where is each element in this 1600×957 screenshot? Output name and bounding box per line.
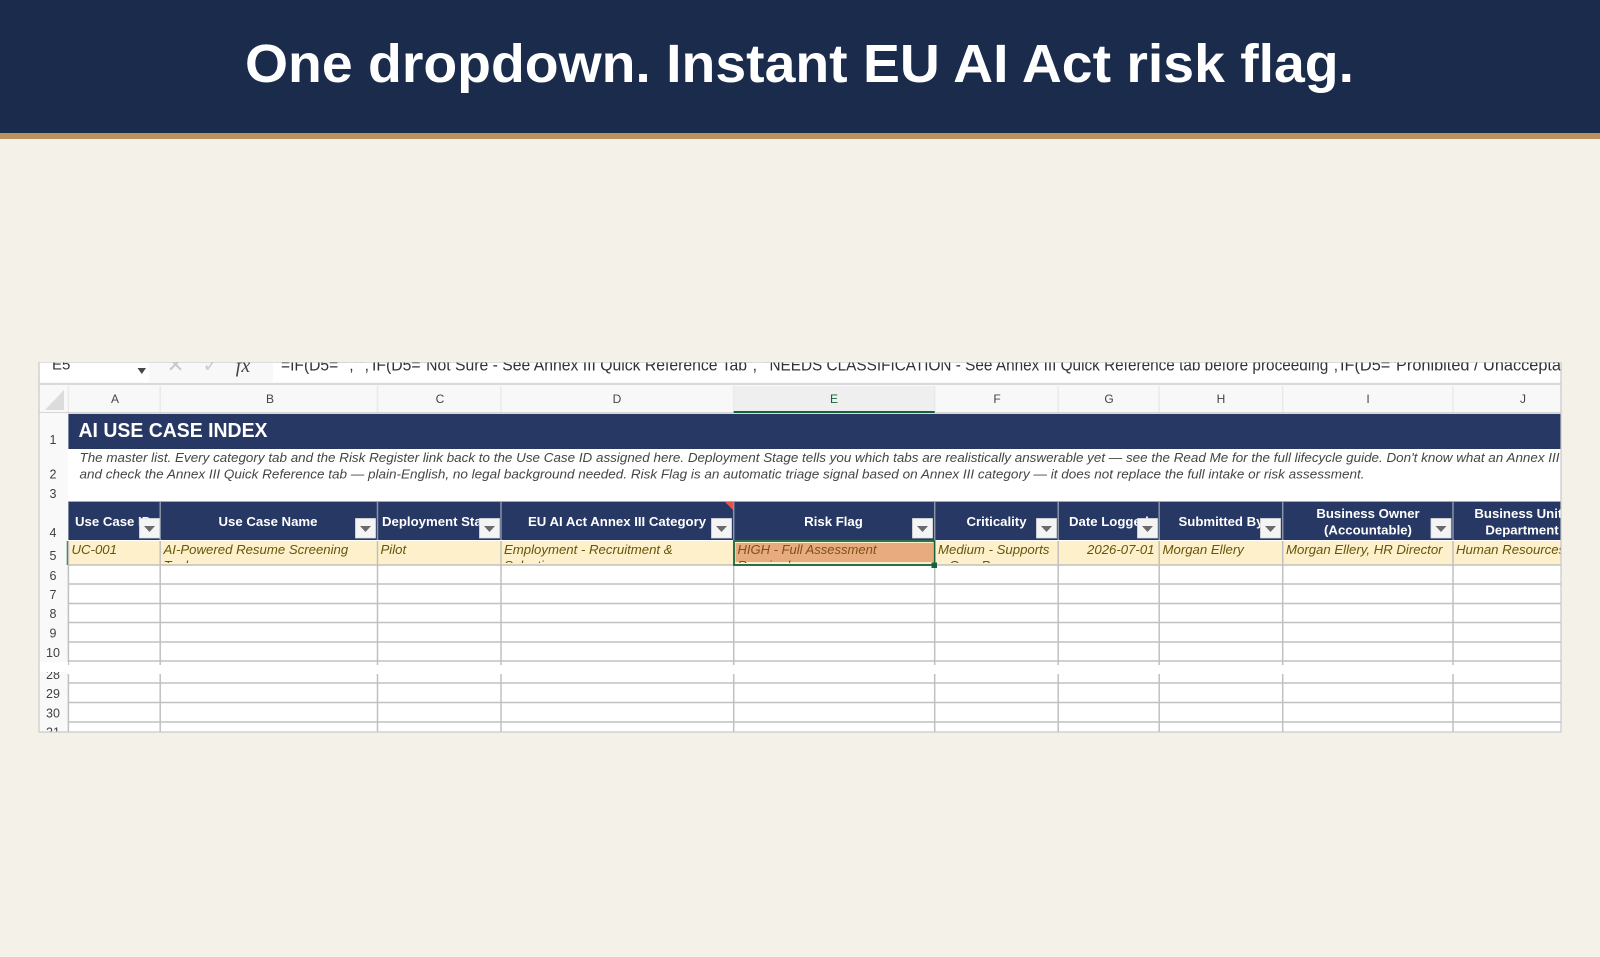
row numbers: 30 bbox=[46, 706, 60, 720]
data row UC-001: Human Resources bbox=[1456, 542, 1566, 557]
spreadsheet screenshot bbox=[39, 354, 1570, 740]
data row UC-001: Required bbox=[738, 558, 791, 573]
row numbers: 5 bbox=[50, 549, 57, 563]
row numbers: 2 bbox=[50, 468, 57, 482]
column headers: E bbox=[830, 392, 838, 406]
sheet title row bbox=[68, 414, 1561, 449]
table header row: Submitted By bbox=[1178, 514, 1264, 529]
column headers: D bbox=[613, 392, 622, 406]
filter buttons bbox=[140, 518, 1451, 538]
row numbers: 29 bbox=[46, 687, 60, 701]
table header row: Department bbox=[1485, 522, 1559, 538]
row numbers: 1 bbox=[50, 433, 57, 447]
formula bar: ✕ bbox=[167, 354, 184, 377]
column headers: I bbox=[1366, 392, 1370, 406]
row numbers: 9 bbox=[50, 626, 57, 640]
table header row: Business Unit / bbox=[1474, 506, 1570, 521]
row numbers: 10 bbox=[46, 646, 60, 660]
table header row: Deployment Stage bbox=[382, 514, 497, 529]
row numbers: 31 bbox=[46, 726, 60, 740]
data row UC-001: Employment - Recruitment & bbox=[504, 542, 673, 557]
title banner bbox=[0, 0, 1600, 139]
risk flag cell bbox=[736, 543, 933, 562]
row numbers: 7 bbox=[50, 588, 57, 602]
selected cell border bbox=[734, 541, 937, 568]
column headers: J bbox=[1520, 392, 1526, 406]
description text: The master list. Every category tab and the Risk Register link back to the Use Case ID assigned here. Deployment Stage tells you which tabs are realistically answerable yet — see the Read Me for the full lifecycle guide. Don't know what an Annex III bbox=[80, 451, 1560, 465]
title: One dropdown. Instant EU AI Act risk flag. bbox=[245, 34, 1354, 94]
table header row: EU AI Act Annex III Category bbox=[528, 514, 707, 529]
data row UC-001: Pilot bbox=[380, 542, 407, 557]
data row UC-001: HIGH - Full Assessment bbox=[738, 542, 878, 557]
table header row bbox=[68, 502, 1570, 540]
formula bar bbox=[40, 362, 1560, 385]
table header row: Criticality bbox=[966, 514, 1027, 529]
formula bar: E5 bbox=[52, 356, 70, 374]
row header strip bbox=[40, 413, 68, 414]
empty grid bbox=[68, 541, 1561, 732]
column headers bbox=[39, 386, 1561, 413]
data row UC-001: UC-001 bbox=[72, 542, 117, 557]
column headers: A bbox=[111, 392, 119, 406]
data row UC-001: AI-Powered Resume Screening bbox=[162, 542, 349, 557]
data row UC-001: Tool bbox=[164, 558, 189, 573]
row numbers: 28 bbox=[46, 668, 60, 682]
data row UC-001: Morgan Ellery, HR Director bbox=[1286, 542, 1443, 557]
column headers: C bbox=[436, 392, 445, 406]
formula bar: =IF(D5="","", bbox=[281, 356, 369, 374]
formula bar: IF(D5="Not Sure - See Annex III Quick Reference Tab", bbox=[372, 356, 757, 374]
row numbers: 3 bbox=[50, 487, 57, 501]
data row UC-001: 2026-07-01 bbox=[1086, 542, 1154, 557]
table header row: Use Case Name bbox=[219, 514, 317, 529]
data row UC-001: Medium - Supports bbox=[938, 542, 1050, 557]
row numbers bbox=[46, 435, 68, 732]
formula bar: fx bbox=[236, 355, 250, 377]
column headers: F bbox=[993, 392, 1001, 406]
spreadsheet outline bbox=[39, 362, 1561, 732]
formula bar: IF(D5="Prohibited / Unaccepta bbox=[1340, 356, 1562, 374]
data row UC-001: Morgan Ellery bbox=[1162, 542, 1245, 557]
column headers: G bbox=[1104, 392, 1114, 406]
description text: and check the Annex III Quick Reference tab — plain-English, no legal background needed. Risk Flag is an automatic triage signal based on Annex III category — it does not replace the full intake or risk assessment. bbox=[80, 468, 1364, 482]
table header row: Use Case ID bbox=[75, 514, 151, 529]
sheet title row: AI USE CASE INDEX bbox=[78, 420, 268, 442]
table header row: Risk Flag bbox=[804, 514, 863, 529]
table header row: Business Owner bbox=[1316, 506, 1420, 521]
table header row: (Accountable) bbox=[1324, 522, 1412, 538]
formula bar: "NEEDS CLASSIFICATION - See Annex III Quick Reference tab before proceeding", bbox=[764, 356, 1338, 374]
table header row: Date Logged bbox=[1069, 514, 1149, 529]
column headers: B bbox=[266, 392, 274, 406]
row numbers: 6 bbox=[50, 569, 57, 583]
row numbers: 8 bbox=[50, 607, 57, 621]
column headers: H bbox=[1217, 392, 1225, 406]
data row UC-001: Selection bbox=[504, 558, 558, 573]
formula bar: ✓ bbox=[202, 354, 220, 377]
data row UC-001: a Core Process bbox=[938, 558, 1029, 573]
description text bbox=[80, 451, 1560, 482]
data row UC-001 bbox=[66, 541, 1560, 565]
row numbers: 4 bbox=[50, 526, 57, 540]
